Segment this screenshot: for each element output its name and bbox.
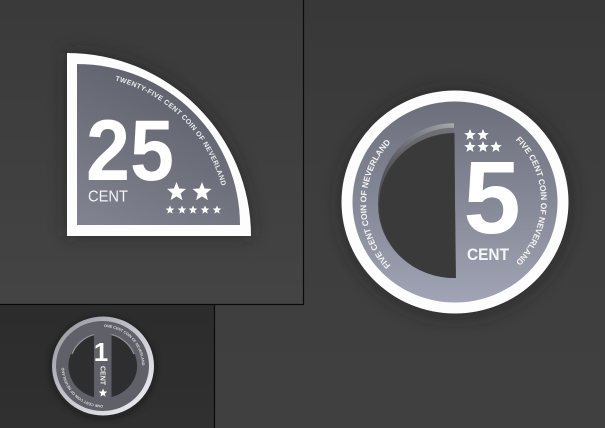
right hole wall highlight xyxy=(112,334,134,354)
left arc inscription: FIVE CENT COIN OF NEVERLAND xyxy=(360,140,390,269)
label CENT: CENT xyxy=(467,246,509,264)
coin rim xyxy=(52,316,154,416)
coin shadow: 25 xyxy=(67,53,251,236)
coin rim xyxy=(342,90,568,314)
denomination 5: 5 xyxy=(463,140,521,255)
hole inner wall xyxy=(378,123,456,278)
coin shadow xyxy=(340,90,572,318)
left hole wall highlight xyxy=(72,334,94,354)
coin face xyxy=(77,64,240,225)
coin face xyxy=(352,102,558,302)
coin: twenty-five cent xyxy=(67,53,251,236)
arc inscription: TWENTY-FIVE CENT COIN OF NEVERLAND xyxy=(116,76,226,186)
right hole xyxy=(112,335,137,397)
panel: twenty-five cent coin xyxy=(0,0,303,304)
left hole xyxy=(68,335,94,397)
label CENT: CENT xyxy=(88,188,128,206)
wall highlight xyxy=(386,125,454,170)
small stars xyxy=(166,206,221,214)
right arc inscription: FIVE CENT COIN OF NEVERLAND xyxy=(516,136,547,265)
coin rim xyxy=(67,53,251,236)
bottom arc inscription: ONE CENT COIN OF NEVERLAND xyxy=(62,368,103,408)
coin: five cent xyxy=(338,89,574,320)
stars xyxy=(464,129,502,152)
denomination 25: 25 xyxy=(86,103,174,199)
top arc inscription: ONE CENT COIN OF NEVERLAND xyxy=(104,324,144,366)
coin face xyxy=(56,321,149,411)
star xyxy=(99,388,107,397)
coin shadow xyxy=(51,318,155,418)
denomination 1: 1 xyxy=(94,337,108,367)
panel dividers xyxy=(0,0,304,428)
panel: one cent coin xyxy=(0,305,214,428)
coin: one cent xyxy=(50,316,156,420)
label CENT: CENT xyxy=(98,366,106,386)
large stars xyxy=(167,182,212,200)
hole xyxy=(379,133,456,278)
